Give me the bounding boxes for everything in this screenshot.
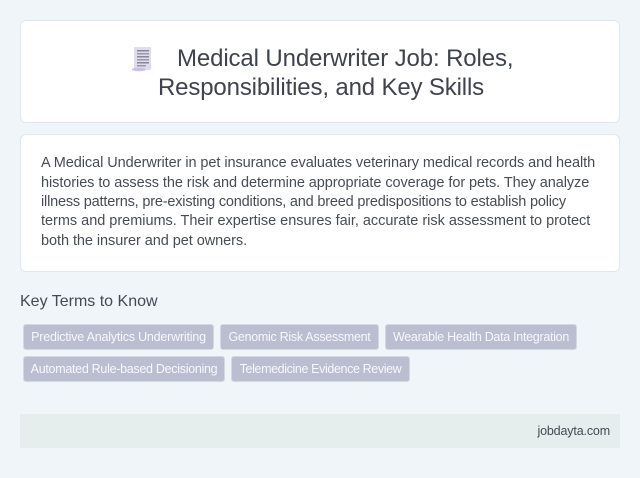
- text block: description: A Medical Underwriter in pet insurance evaluates veterinary medical records and health: [41, 155, 595, 171]
- title: [158, 45, 513, 101]
- text block: description: both the insurer and pet owners.: [41, 233, 247, 249]
- tag: automated decisioning: [23, 356, 225, 382]
- title: Medical Underwriter Job: Roles,: [177, 45, 513, 72]
- panel: description card: [20, 134, 620, 272]
- text block: description: histories to assess the risk and determine appropriate coverage for pets. They analyze: [41, 175, 589, 191]
- text block: description: illness patterns, pre-existing conditions, and breed predispositions to establish policy: [41, 194, 566, 210]
- tag list: key terms: [23, 324, 577, 382]
- title: Responsibilities, and Key Skills: [158, 74, 484, 101]
- tag: automated decisioning: Automated Rule-based Decisioning: [31, 362, 217, 376]
- tag: wearable health data: Wearable Health Data Integration: [393, 330, 569, 344]
- tag: wearable health data: [385, 324, 577, 350]
- footer source text: jobdayta.com: [537, 424, 610, 438]
- icon: medical document scroll: [132, 47, 151, 72]
- tag: predictive analytics: [23, 324, 214, 350]
- tag: telemedicine evidence: Telemedicine Evidence Review: [240, 362, 401, 376]
- tag: telemedicine evidence: [231, 356, 410, 382]
- text block: description: terms and premiums. Their expertise ensures fair, accurate risk assessment to protect: [41, 213, 590, 229]
- text block: description: [41, 155, 595, 249]
- tag: genomic risk: [220, 324, 379, 350]
- panel: title card: [20, 20, 620, 123]
- tag: predictive analytics: Predictive Analytics Underwriting: [31, 330, 206, 344]
- heading: key terms: Key Terms to Know: [20, 293, 158, 310]
- tag: genomic risk: Genomic Risk Assessment: [228, 330, 370, 344]
- footer bar: [20, 414, 620, 448]
